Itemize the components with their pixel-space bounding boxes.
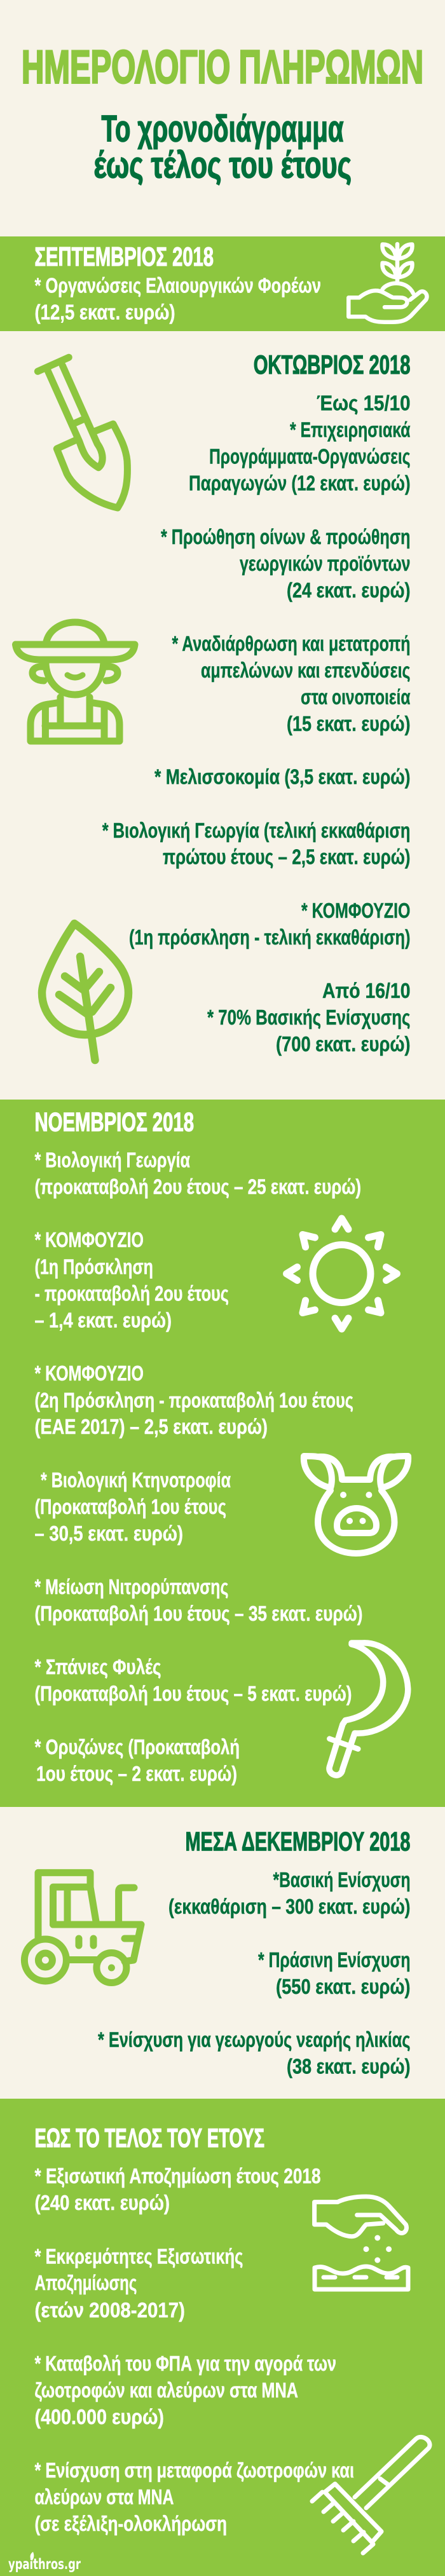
- text: compost first call: – 1,4 εκατ. ευρώ): [34, 1309, 172, 1332]
- heading: until end of year: ΕΩΣ ΤΟ ΤΕΛΟΣ ΤΟΥ ΕΤΟΥΣ: [34, 2123, 264, 2153]
- text: nitrate reduction: [34, 1576, 362, 1626]
- text: organic livestock: – 30,5 εκατ. ευρώ): [34, 1522, 183, 1546]
- text: compost second call: * ΚΟΜΦΟΥΖΙΟ: [34, 1362, 144, 1386]
- text: wine promotion: [161, 526, 411, 603]
- icon: spade: [38, 357, 127, 508]
- text: compost first call: - προκαταβολή 2ου έτους: [34, 1283, 229, 1305]
- text: green support: [258, 1949, 411, 1999]
- text: september payments: (12,5 εκατ. ευρώ): [34, 301, 175, 325]
- text: VAT refund: (400.000 ευρώ): [34, 2406, 164, 2429]
- subtitle: έως τέλος του έτους: [94, 145, 352, 186]
- panel: until end of year: [0, 2099, 445, 2576]
- icon: rake: [312, 2437, 430, 2553]
- panel: september: [0, 236, 445, 331]
- text: pending compensatory allowance: (ετών 2008-2017): [34, 2299, 185, 2322]
- text: september payments: * Οργανώσεις Ελαιουργικών Φορέων: [34, 275, 321, 298]
- subtitle: [94, 108, 352, 186]
- text: compost: * ΚΟΜΦΟΥΖΙΟ: [301, 899, 411, 923]
- text: organic livestock: (Προκαταβολή 1ου έτους: [34, 1496, 226, 1519]
- text: basic support: [168, 1869, 411, 1919]
- text: vineyards: [172, 632, 411, 736]
- text: compost first call: [34, 1229, 229, 1332]
- text: rare breeds: [34, 1656, 352, 1706]
- text: compost second call: (2η Πρόσκληση - προκαταβολή 1ου έτους: [34, 1389, 353, 1412]
- panel: october: [15, 350, 411, 1060]
- panel: mid december: [24, 1827, 410, 2078]
- text: rice fields: 1ου έτους – 2 εκατ. ευρώ): [36, 1762, 237, 1786]
- text: organic farming advance: (προκαταβολή 2ου έτους – 25 εκατ. ευρώ): [34, 1176, 361, 1199]
- text: VAT refund: * Καταβολή του ΦΠΑ για την αγορά των: [34, 2352, 336, 2376]
- text: compost second call: [34, 1362, 353, 1439]
- logo: ypaithros.gr: [8, 2552, 81, 2573]
- text: organic farming advance: [34, 1149, 361, 1199]
- text: wine promotion: (24 εκατ. ευρώ): [287, 579, 411, 603]
- text: organic livestock: [34, 1469, 231, 1546]
- icon: farmer: [15, 622, 135, 741]
- text: until 15/10: Έως 15/10: [317, 392, 411, 416]
- icon: leaf: [42, 923, 128, 1060]
- text: compost second call: (ΕΑΕ 2017) – 2,5 εκατ. ευρώ): [34, 1415, 268, 1439]
- text: organic farming: [102, 819, 410, 869]
- text: until 15/10: [189, 392, 411, 496]
- text: pending compensatory allowance: [34, 2245, 243, 2322]
- icon: tractor: [24, 1872, 141, 1983]
- text: compost: [129, 899, 411, 950]
- text: nitrate reduction: * Μείωση Νιτρορύπανσης: [34, 1576, 228, 1599]
- text: from 16/10: Από 16/10: [322, 979, 411, 1003]
- icon: pig: [304, 1456, 408, 1553]
- text: rare breeds: (Προκαταβολή 1ου έτους – 5 εκατ. ευρώ): [34, 1682, 352, 1706]
- text: nitrate reduction: (Προκαταβολή 1ου έτους – 35 εκατ. ευρώ): [34, 1602, 362, 1626]
- text: feed transport: [34, 2459, 354, 2536]
- text: rare breeds: * Σπάνιες Φυλές: [34, 1656, 161, 1679]
- heading: november: ΝΟΕΜΒΡΙΟΣ 2018: [34, 1107, 194, 1136]
- text: september payments: [34, 275, 321, 325]
- text: young farmers: (38 εκατ. ευρώ): [287, 2055, 411, 2078]
- text: VAT refund: ζωοτροφών και αλεύρων στα ΜΝΑ: [34, 2379, 298, 2402]
- text: pending compensatory allowance: Αποζημίωσης: [34, 2272, 137, 2295]
- text: compost first call: * ΚΟΜΦΟΥΖΙΟ: [34, 1229, 144, 1252]
- text: compost first call: (1η Πρόσκληση: [34, 1256, 153, 1279]
- text: organic farming advance: * Βιολογική Γεωργία: [34, 1149, 190, 1173]
- text: rice fields: [34, 1736, 240, 1786]
- text: pending compensatory allowance: * Εκκρεμότητες Εξισωτικής: [34, 2245, 243, 2269]
- icon: hand sowing seeds: [315, 2197, 408, 2289]
- icon: sickle: [329, 1643, 408, 1775]
- text: VAT refund: [34, 2352, 336, 2429]
- text: compensatory allowance 2018: (240 εκατ. ευρώ): [34, 2191, 170, 2215]
- text: from 16/10: (700 εκατ. ευρώ): [276, 1033, 411, 1056]
- text: feed transport: (σε εξέλιξη-ολοκλήρωση: [34, 2512, 227, 2536]
- text: compensatory allowance 2018: [34, 2165, 320, 2215]
- text: vineyards: (15 εκατ. ευρώ): [287, 712, 411, 736]
- text: young farmers: [98, 2029, 411, 2078]
- text: feed transport: αλεύρων στα ΜΝΑ: [34, 2486, 174, 2509]
- logo: ypaithros.gr: ypaithros.gr: [8, 2556, 81, 2573]
- subtitle: Το χρονοδιάγραμμα: [102, 108, 344, 150]
- icon: sun: [286, 1218, 397, 1329]
- text: organic livestock: * Βιολογική Κτηνοτροφία: [41, 1469, 231, 1492]
- text: compensatory allowance 2018: * Εξισωτική Αποζημίωση έτους 2018: [34, 2165, 320, 2188]
- panel: november: [0, 1100, 445, 1807]
- heading: september: ΣΕΠΤΕΜΒΡΙΟΣ 2018: [34, 242, 214, 271]
- text: rice fields: * Ορυζώνες (Προκαταβολή: [34, 1736, 240, 1759]
- text: green support: (550 εκατ. ευρώ): [276, 1975, 411, 1999]
- icon: seedling in hand: [348, 244, 427, 322]
- text: from 16/10: [207, 979, 411, 1056]
